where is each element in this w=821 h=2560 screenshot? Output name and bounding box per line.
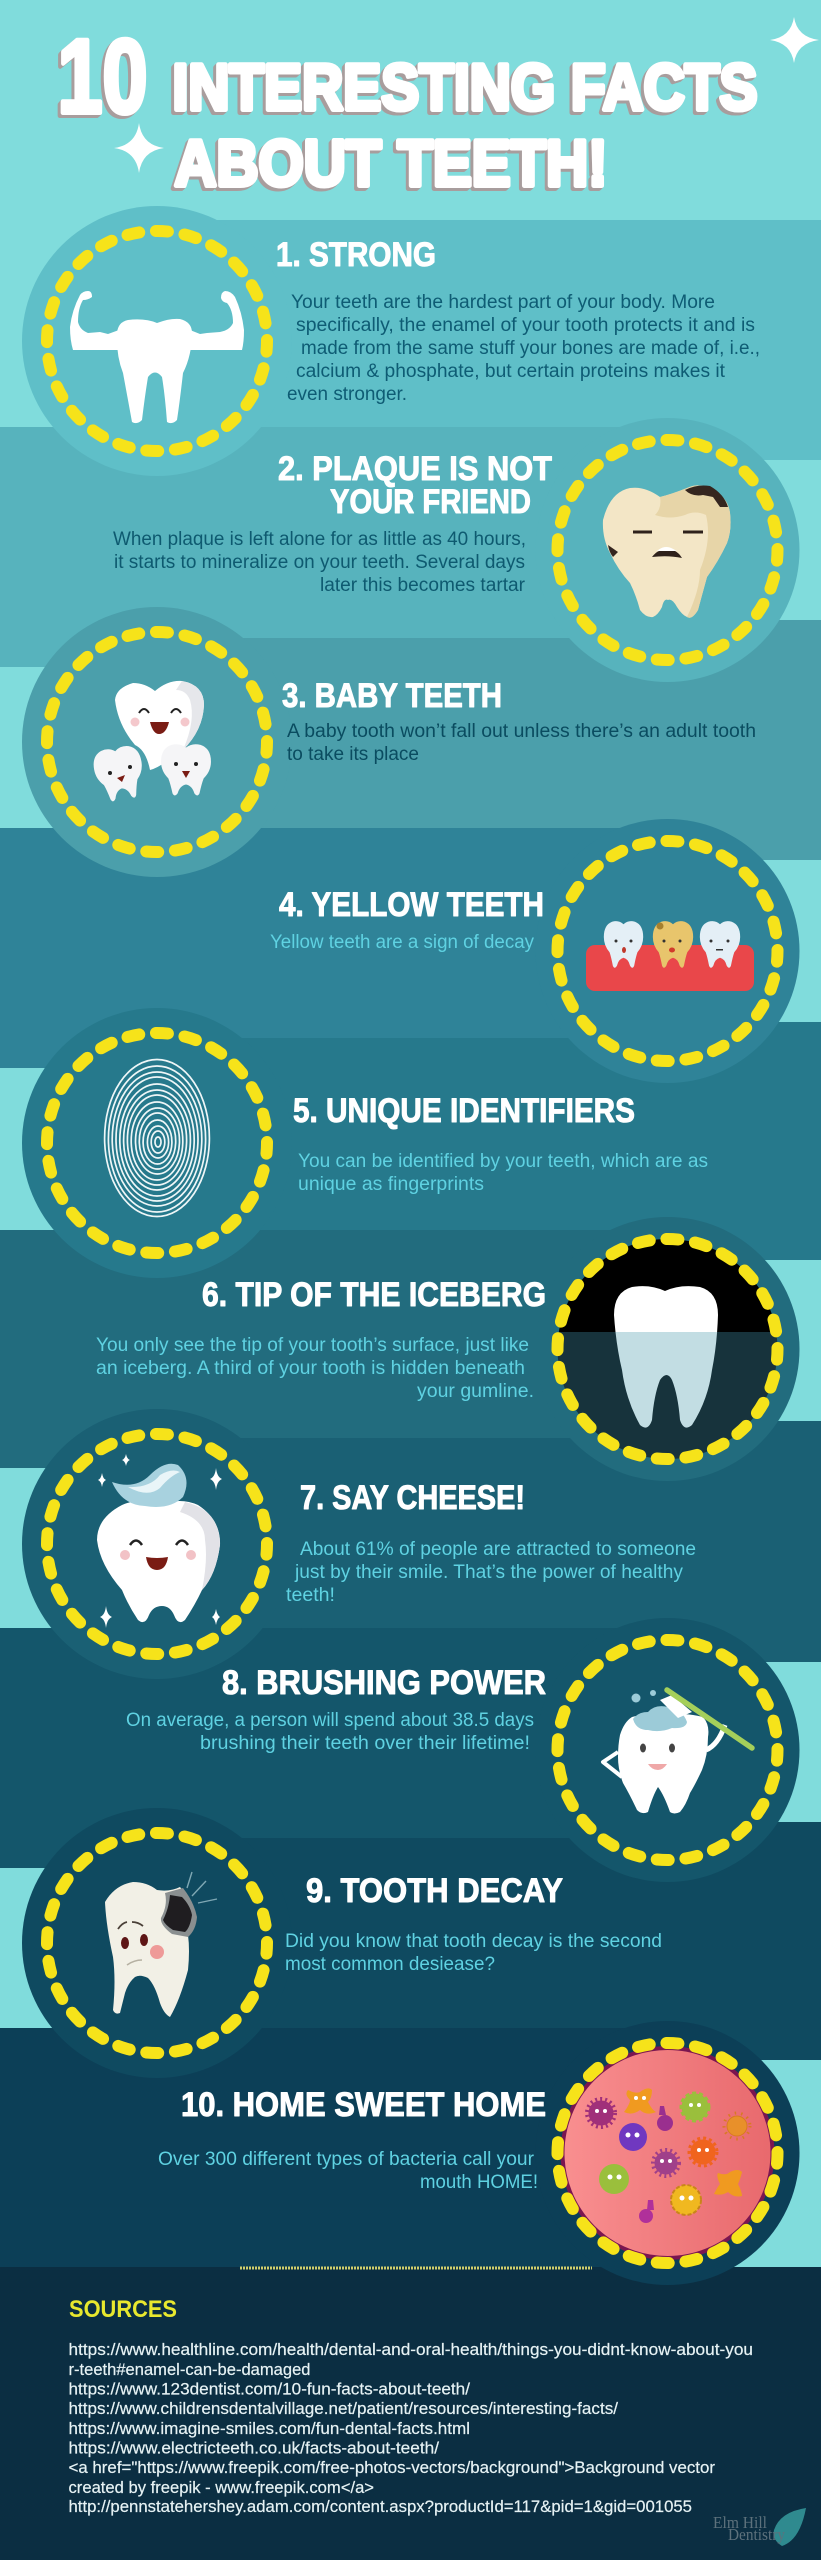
sparkle: left of title bbox=[114, 123, 164, 173]
heading: 4. YELLOW TEETH bbox=[279, 886, 544, 924]
icon: cartoon bacteria bbox=[587, 2088, 750, 2223]
sparkle: top right bbox=[770, 17, 819, 63]
heading: 3. BABY TEETH bbox=[282, 677, 502, 715]
body text: Yellow teeth are a sign of decay bbox=[270, 932, 534, 953]
heading: 5. UNIQUE IDENTIFIERS bbox=[293, 1092, 635, 1130]
heading: 8. BRUSHING POWER bbox=[222, 1664, 546, 1702]
heading: 2. PLAQUE IS NOT bbox=[278, 450, 552, 488]
source list: <a href="https://www.freepik.com/free-photos-vectors/background">Background vector bbox=[68, 2458, 715, 2477]
body text bbox=[287, 292, 760, 405]
panel: sources bbox=[68, 2296, 753, 2516]
body text bbox=[286, 1539, 696, 1606]
body text: specifically, the enamel of your tooth protects it and is bbox=[296, 315, 755, 336]
body text: brushing their teeth over their lifetime! bbox=[200, 1733, 530, 1754]
title: 10 bbox=[58, 18, 148, 136]
panel: 6 tip of the iceberg bbox=[96, 1217, 800, 1481]
body text bbox=[285, 1931, 662, 1975]
body text: it starts to mineralize on your teeth. Several days bbox=[114, 552, 525, 573]
logo: Elm Hill Dentistry: Elm Hill bbox=[713, 2513, 767, 2532]
icon: gums with three teeth bbox=[586, 921, 754, 991]
source list: https://www.imagine-smiles.com/fun-dental-facts.html bbox=[68, 2419, 470, 2438]
heading: 9. TOOTH DECAY bbox=[306, 1872, 563, 1910]
title: INTERESTING FACTS bbox=[172, 50, 758, 124]
heading: 1. STRONG bbox=[276, 236, 436, 274]
panel: 4 yellow teeth bbox=[270, 819, 800, 1083]
body text: You only see the tip of your tooth’s surface, just like bbox=[96, 1335, 529, 1356]
body text: Did you know that tooth decay is the second bbox=[285, 1931, 662, 1952]
body text: About 61% of people are attracted to someone bbox=[300, 1539, 696, 1560]
dotted divider bbox=[240, 2266, 592, 2270]
source list: https://www.healthline.com/health/dental-and-oral-health/things-you-didnt-know-about-you bbox=[68, 2340, 753, 2359]
icon: tooth brushing itself bbox=[603, 1690, 752, 1814]
logo: Elm Hill Dentistry bbox=[713, 2508, 806, 2546]
icon: decayed tooth bbox=[105, 1872, 217, 2017]
body text bbox=[113, 529, 526, 596]
body text: Over 300 different types of bacteria call your bbox=[158, 2149, 535, 2170]
body text: mouth HOME! bbox=[420, 2172, 538, 2193]
panel: 2 plaque bbox=[113, 418, 800, 682]
source list bbox=[68, 2340, 753, 2516]
title bbox=[58, 18, 758, 200]
heading: YOUR FRIEND bbox=[330, 483, 531, 521]
body text: When plaque is left alone for as little as 40 hours, bbox=[113, 529, 526, 550]
body text bbox=[158, 2149, 538, 2193]
icon: tooth half above and below gumline bbox=[558, 1239, 778, 1459]
body text bbox=[298, 1151, 708, 1195]
body text: made from the same stuff your bones are made of, i.e., bbox=[301, 338, 760, 359]
source list: r-teeth#enamel-can-be-damaged bbox=[68, 2360, 310, 2379]
body text: most common desiease? bbox=[285, 1954, 495, 1975]
body text: even stronger. bbox=[287, 384, 407, 405]
body text: just by their smile. That’s the power of healthy bbox=[294, 1562, 683, 1583]
source list: https://www.123dentist.com/10-fun-facts-about-teeth/ bbox=[68, 2380, 470, 2398]
body text bbox=[287, 721, 756, 765]
body text bbox=[126, 1710, 534, 1754]
panel: 10 home sweet home bbox=[158, 2021, 800, 2285]
icon: baby teeth family bbox=[91, 681, 211, 804]
icon: smiling tooth with toothpaste bbox=[97, 1454, 222, 1628]
panel: 9 tooth decay bbox=[22, 1808, 662, 2078]
body text: A baby tooth won’t fall out unless there’s an adult tooth bbox=[287, 721, 756, 742]
body text: calcium & phosphate, but certain proteins makes it bbox=[296, 361, 726, 382]
icon: fingerprint bbox=[105, 1060, 209, 1216]
body text: You can be identified by your teeth, which are as bbox=[298, 1151, 708, 1172]
body text bbox=[96, 1335, 534, 1402]
body text: unique as fingerprints bbox=[298, 1174, 484, 1195]
source list: https://www.electricteeth.co.uk/facts-about-teeth/ bbox=[68, 2438, 439, 2458]
heading: 10. HOME SWEET HOME bbox=[181, 2086, 546, 2124]
body text: later this becomes tartar bbox=[320, 575, 526, 596]
panel: 1 strong bbox=[22, 206, 760, 476]
panel: 5 unique identifiers bbox=[22, 1008, 708, 1278]
source list: created by freepik - www.freepik.com</a> bbox=[68, 2478, 374, 2497]
body text: teeth! bbox=[286, 1585, 335, 1606]
icon: muscular tooth bbox=[70, 291, 244, 423]
heading: 7. SAY CHEESE! bbox=[300, 1479, 525, 1517]
heading bbox=[278, 450, 552, 521]
body text: On average, a person will spend about 38.5 days bbox=[126, 1710, 534, 1731]
logo: Elm Hill Dentistry: Dentistry bbox=[728, 2525, 785, 2544]
icon: plaque tooth bbox=[603, 485, 731, 618]
source list: https://www.childrensdentalvillage.net/patient/resources/interesting-facts/ bbox=[68, 2399, 618, 2418]
panel: 8 brushing power bbox=[126, 1618, 800, 1882]
sources heading: SOURCES bbox=[69, 2296, 177, 2323]
body text: to take its place bbox=[287, 744, 419, 765]
title: ABOUT TEETH! bbox=[174, 126, 608, 200]
source list: http://pennstatehershey.adam.com/content.aspx?productId=117&pid=1&gid=001055 bbox=[68, 2497, 692, 2516]
body text: Your teeth are the hardest part of your body. More bbox=[291, 292, 715, 313]
body text: your gumline. bbox=[417, 1381, 534, 1402]
panel: 7 say cheese bbox=[22, 1409, 696, 1679]
body text: an iceberg. A third of your tooth is hidden beneath bbox=[96, 1358, 525, 1379]
heading: 6. TIP OF THE ICEBERG bbox=[202, 1276, 546, 1314]
panel: 3 baby teeth bbox=[22, 607, 756, 877]
